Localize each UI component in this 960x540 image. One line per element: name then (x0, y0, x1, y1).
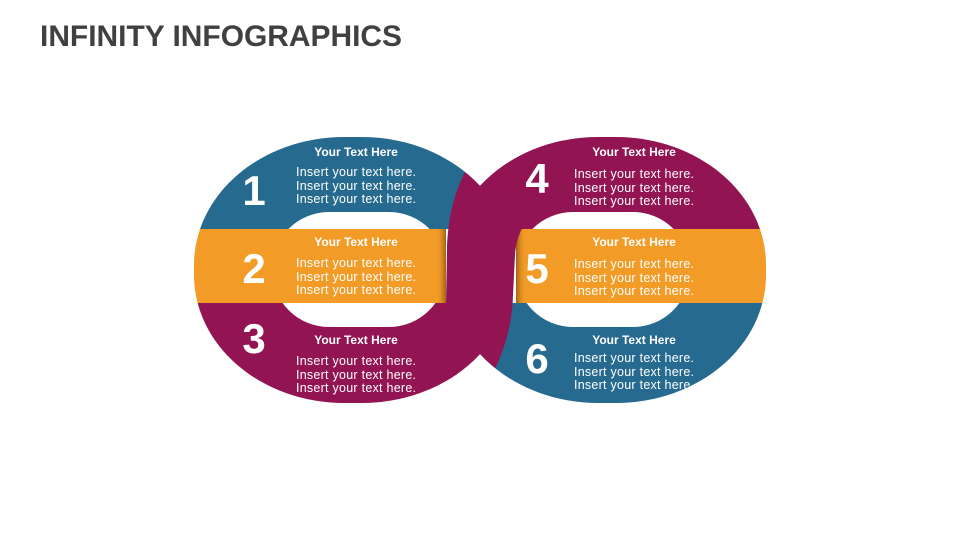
segment 2: Insert your text here. (296, 270, 416, 284)
title: INFINITY INFOGRAPHICS (40, 20, 402, 53)
segment 5: Insert your text here. (574, 271, 694, 285)
segment 3: 3 (242, 315, 266, 362)
segment 4: Your Text Here (592, 145, 676, 159)
segment 4: 4 (525, 155, 549, 202)
right ring (480, 137, 766, 403)
left ring (194, 137, 480, 403)
segment 2 (242, 235, 416, 297)
segment 4: Insert your text here. (574, 181, 694, 195)
segment 6 (525, 333, 694, 392)
segment 3: Insert your text here. (296, 381, 416, 395)
segment 4: Insert your text here. (574, 167, 694, 181)
segment 1 (242, 145, 416, 214)
segment 1: 1 (242, 167, 266, 214)
infinity diagram (193, 130, 768, 410)
segment 1: Insert your text here. (296, 179, 416, 193)
segment 5: Insert your text here. (574, 257, 694, 271)
segment 5: Your Text Here (592, 235, 676, 249)
segment 5: Insert your text here. (574, 284, 694, 298)
segment 6: 6 (525, 335, 549, 382)
segment 3: Insert your text here. (296, 368, 416, 382)
segment 1: Your Text Here (314, 145, 398, 159)
segment 4: Insert your text here. (574, 194, 694, 208)
segment 5: 5 (525, 245, 549, 292)
segment 6: Insert your text here. (574, 365, 694, 379)
crossing band (429, 140, 563, 390)
segment 5 (525, 235, 694, 298)
segment 2: Your Text Here (314, 235, 398, 249)
segment 3: Your Text Here (314, 333, 398, 347)
segment 6: Insert your text here. (574, 378, 694, 392)
segment 3 (242, 315, 416, 395)
segment 6: Your Text Here (592, 333, 676, 347)
segment 1: Insert your text here. (296, 165, 416, 179)
segment 2: Insert your text here. (296, 283, 416, 297)
segment 1: Insert your text here. (296, 192, 416, 206)
segment 4 (525, 145, 694, 208)
segment 6: Insert your text here. (574, 351, 694, 365)
segment 2: 2 (242, 245, 266, 292)
segment 2: Insert your text here. (296, 256, 416, 270)
segment 3: Insert your text here. (296, 354, 416, 368)
